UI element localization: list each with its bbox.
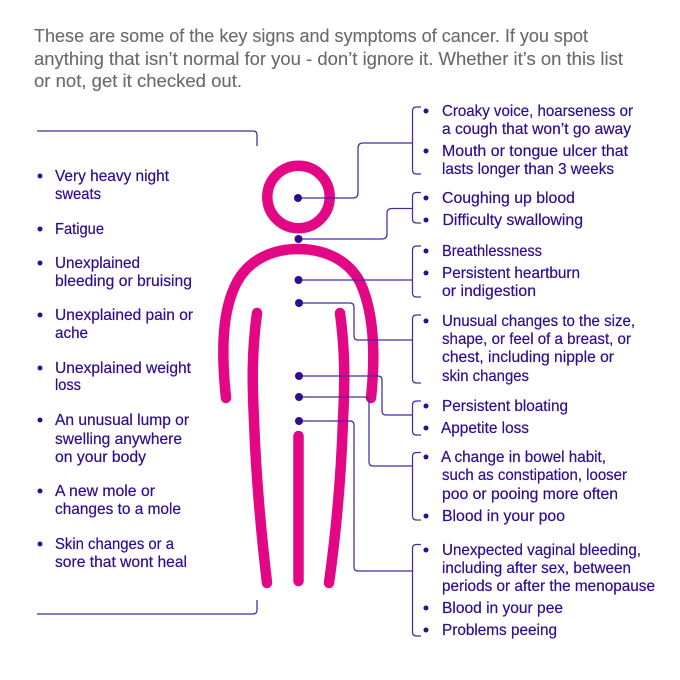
body location dots: [294, 194, 303, 425]
right inner arm and leg: [329, 313, 344, 583]
left symptom list: Skin changes or a: [55, 536, 174, 553]
right symptom list: or indigestion: [442, 283, 536, 300]
right symptom list: such as constipation, looser: [442, 467, 627, 484]
intro text: or not, get it checked out.: [34, 70, 242, 91]
left symptom list: Fatigue: [55, 221, 104, 238]
right symptom list: skin changes: [442, 368, 529, 385]
connector: neck: [298, 192, 421, 239]
right symptom list: Breathlessness: [442, 243, 542, 260]
right symptom list: Blood in your pee: [442, 600, 563, 617]
right symptom list: Problems peeing: [442, 622, 557, 639]
right symptom list: chest, including nipple or: [442, 349, 614, 366]
right symptom list: Persistent bloating: [442, 398, 568, 415]
left symptom list: Unexplained: [55, 255, 140, 272]
body figure: [223, 166, 373, 583]
right symptom list: Appetite loss: [441, 420, 529, 437]
head: [267, 166, 330, 228]
connector: chest: [298, 246, 421, 297]
right symptom list: poo or pooing more often: [442, 486, 618, 503]
left bracket: [37, 131, 257, 614]
right symptom list: periods or after the menopause: [442, 578, 655, 595]
left symptom list: [38, 168, 193, 571]
right symptom list: Unusual changes to the size,: [442, 313, 635, 330]
right symptom list: Difficulty swallowing: [442, 212, 583, 229]
left symptom list: sore that wont heal: [55, 554, 187, 571]
right symptom list: A change in bowel habit,: [441, 449, 606, 466]
left symptom list: sweats: [55, 186, 101, 203]
shoulders and outer arms: [223, 249, 373, 398]
left symptom list: changes to a mole: [55, 501, 181, 518]
left symptom list: A new mole or: [55, 483, 155, 500]
right symptom list: lasts longer than 3 weeks: [442, 161, 614, 178]
left symptom list: Unexplained pain or: [55, 307, 193, 324]
left symptom list: Unexplained weight: [55, 360, 192, 377]
left symptom list: on your body: [55, 449, 146, 466]
right symptom list: Blood in your poo: [442, 508, 565, 525]
intro text: [34, 25, 623, 91]
intro text: These are some of the key signs and symptoms of cancer. If you spot: [34, 25, 588, 46]
left symptom list: Very heavy night: [55, 168, 170, 185]
right symptom list: Mouth or tongue ulcer that: [442, 143, 629, 160]
intro text: anything that isn’t normal for you - don’t ignore it. Whether it’s on this list: [34, 48, 623, 69]
right symptom list: [424, 103, 655, 639]
connector: throat and mouth: [298, 107, 421, 198]
connector: pelvis: [299, 421, 421, 636]
right symptom list: Unexpected vaginal bleeding,: [442, 542, 641, 559]
left symptom list: An unusual lump or: [55, 412, 189, 429]
left symptom list: loss: [55, 377, 81, 394]
connector: breast: [299, 303, 421, 383]
right symptom list: including after sex, between: [442, 560, 631, 577]
right symptom list: a cough that won’t go away: [442, 121, 631, 138]
right symptom list: Persistent heartburn: [442, 265, 580, 282]
left symptom list: ache: [55, 325, 88, 342]
connector: bowel: [299, 397, 421, 520]
right symptom list: shape, or feel of a breast, or: [442, 331, 631, 348]
right symptom list: Croaky voice, hoarseness or: [442, 103, 633, 120]
centre leg line: [293, 436, 304, 581]
right symptom list: Coughing up blood: [442, 190, 575, 207]
connector: stomach: [299, 376, 421, 435]
left inner arm and leg: [253, 313, 267, 583]
left symptom list: bleeding or bruising: [55, 273, 192, 290]
connector lines and brackets: [298, 107, 421, 636]
left symptom list: swelling anywhere: [55, 431, 182, 448]
